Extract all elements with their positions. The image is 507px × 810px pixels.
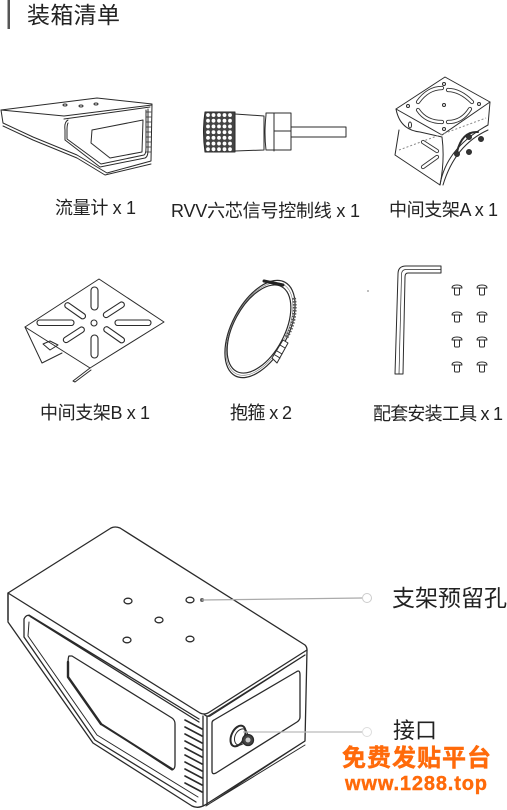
connector port <box>227 723 254 749</box>
icon: bracket B <box>25 279 164 382</box>
watermark: www.1288.top <box>344 773 487 795</box>
title: packing list: 装箱清单 <box>27 2 120 28</box>
icon: screws <box>452 285 487 372</box>
callout: mount holes <box>200 585 507 611</box>
watermark <box>342 744 491 795</box>
label: clamp: 抱箍 x 2 <box>230 403 292 423</box>
mount holes <box>124 598 132 604</box>
callout: connector <box>243 718 437 743</box>
callout: mount holes: 支架预留孔 <box>392 585 507 611</box>
icon: hex key and screws <box>368 266 487 374</box>
icon: RVV connector cable <box>204 112 346 152</box>
icon: hose clamp <box>210 269 310 389</box>
label: bracket A: 中间支架A x 1 <box>389 200 498 220</box>
icon: flow meter small <box>1 98 152 175</box>
watermark: 免费发贴平台 <box>342 744 491 772</box>
vents <box>185 720 202 792</box>
label: tools: 配套安装工具 x 1 <box>373 404 503 424</box>
icon: bracket A <box>395 77 490 185</box>
illustration: flow meter large <box>8 527 307 807</box>
left window <box>68 656 175 770</box>
left frame <box>24 615 199 802</box>
callout: connector: 接口 <box>393 718 437 743</box>
label: bracket B: 中间支架B x 1 <box>40 403 150 423</box>
label: RVV cable: RVV六芯信号控制线 x 1 <box>171 201 360 221</box>
label: flow meter: 流量计 x 1 <box>55 198 136 218</box>
right panel <box>212 671 300 774</box>
